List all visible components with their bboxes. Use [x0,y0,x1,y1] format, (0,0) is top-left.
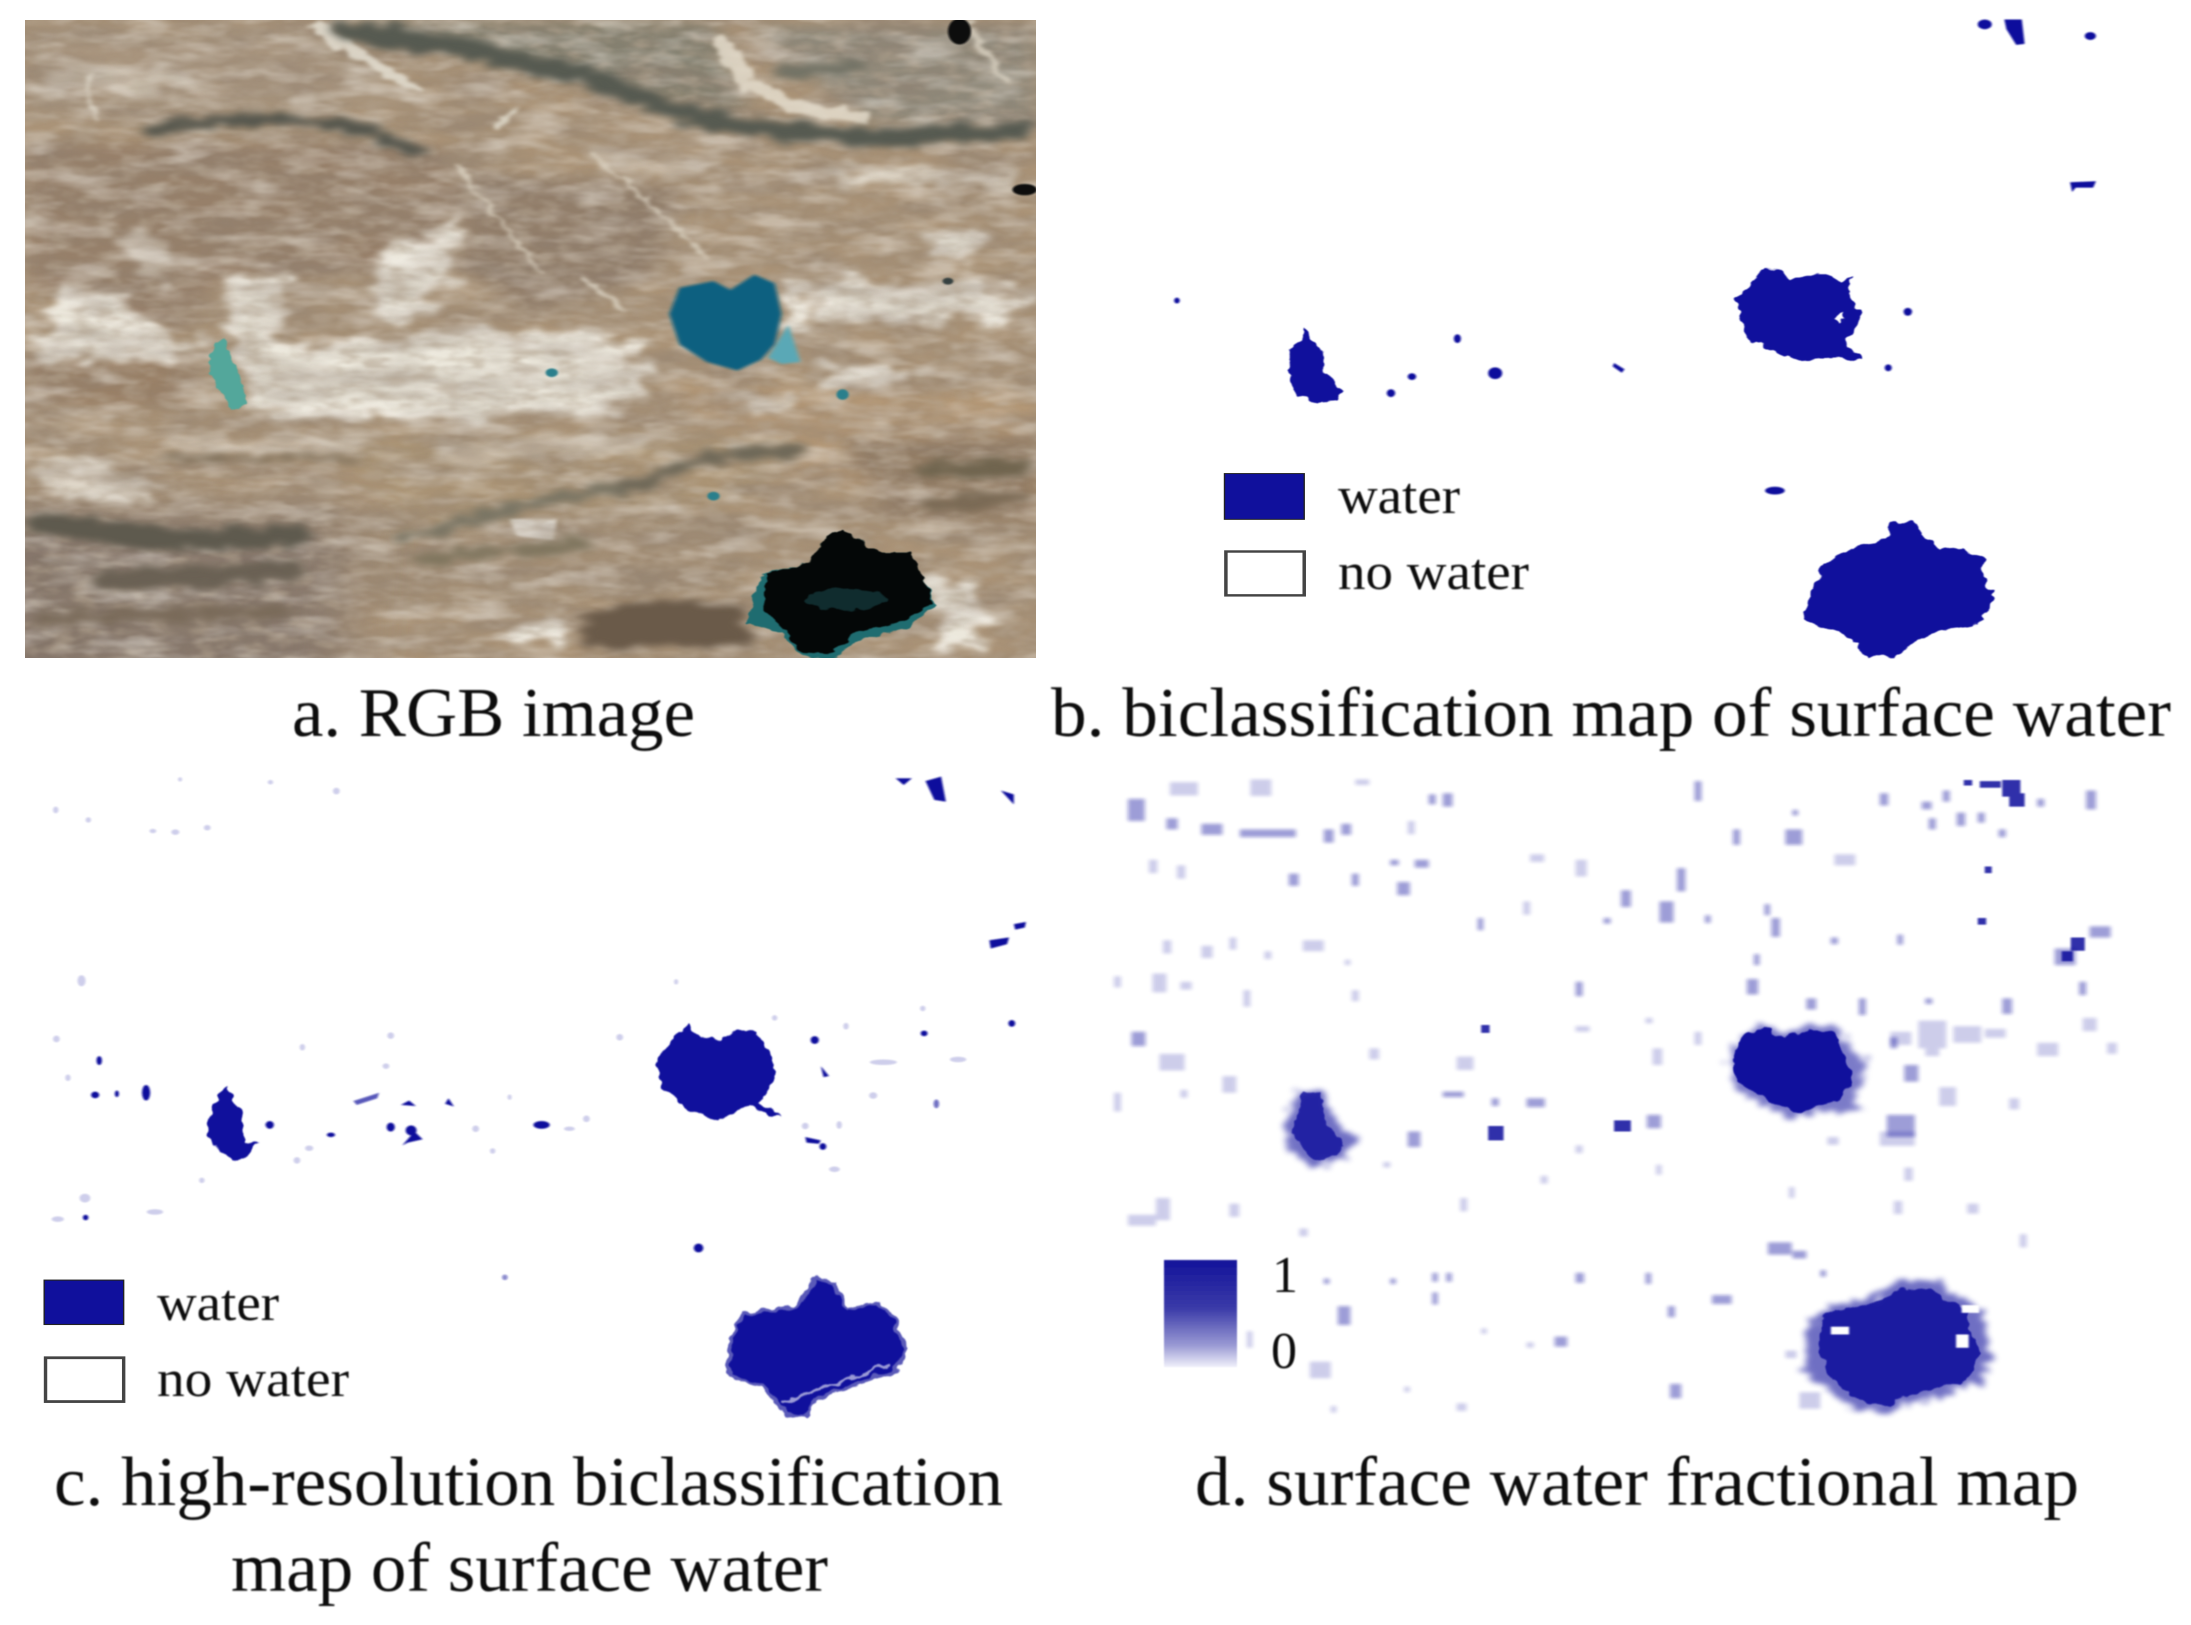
legend label water b: water [1338,468,1460,525]
swatch water [1224,474,1304,519]
legend label no water b: no water [1338,544,1529,601]
legend label water c: water [157,1275,279,1332]
swatch no water [46,1358,124,1402]
lake shape b west [1287,329,1343,402]
lake: pale green western lake [207,338,248,410]
faint noise c [52,777,966,1222]
medium pixels d [1128,781,2111,1398]
swatch no water [1226,552,1304,595]
legend c [44,1280,124,1402]
caption a: a. RGB image [292,675,695,752]
lake shape d west [1285,1090,1359,1168]
legend label no water c: no water [157,1351,349,1408]
scale bar [1164,1260,1237,1367]
panel c: high-resolution biclassification map [52,777,1026,1417]
colour scale d [1164,1247,1298,1380]
strong pixels d [1481,780,2085,1140]
lake shape c west [207,1084,258,1160]
lake shape b central [1733,270,1864,362]
panel d: fractional map [1114,779,2117,1413]
lake: teal central lake [669,275,800,371]
panel b: biclassification map [1174,19,2096,657]
lake shape c south [728,1278,905,1417]
scale label 0: 0 [1271,1323,1297,1380]
caption b: b. biclassification map of surface water [1051,675,2171,752]
lake shape d south [1804,1277,1992,1410]
small water bodies b [1174,19,2096,495]
lake shape b south [1803,522,1993,657]
faint pixels d [1114,779,2117,1413]
lake shape c central [656,1026,781,1120]
swatch water [44,1280,124,1324]
legend b [1224,474,1304,595]
small water bodies c [83,777,1026,1280]
lake shape d central [1729,1024,1869,1118]
lake: dark southern lake [747,528,934,658]
caption c line 1: c. high-resolution biclassification [54,1444,1003,1521]
panel a: RGB image [0,18,1043,697]
scale label 1: 1 [1272,1247,1298,1304]
caption d: d. surface water fractional map [1195,1444,2079,1521]
caption c line 2: map of surface water [231,1530,828,1607]
